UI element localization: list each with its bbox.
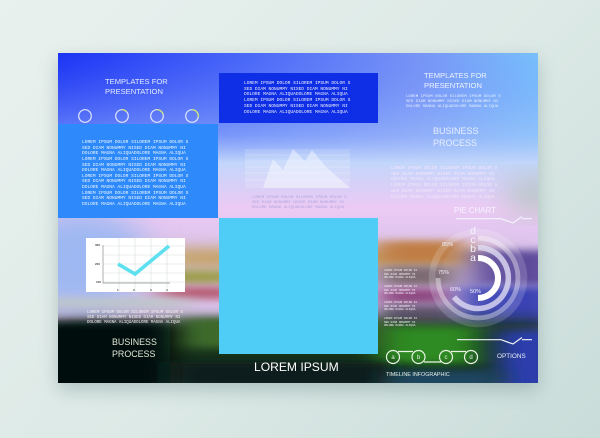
chart: radial pie chart: c [470,234,476,246]
chart: translucent mountain area [245,149,350,188]
chart: radial pie chart: d [470,225,476,237]
chart: radial pie chart [428,225,528,328]
label: timeline infographic: TIMELINE INFOGRAPHIC [386,372,450,378]
heading: templates for presentation right [424,71,487,90]
heading: templates for presentation left: PRESENTATION [105,87,163,96]
heading: business process right [433,126,479,148]
text block: small lorem column: LOREM IPSUM DOLOR SI SED DIAM NONUMMY NI DOLORE MAGNA ALIQUA [384,269,417,279]
divider arrow: options [457,337,532,345]
text block: small lorem column: LOREM IPSUM DOLOR SI SED DIAM NONUMMY NI DOLORE MAGNA ALIQUA [384,301,417,311]
label: options: OPTIONS [497,353,526,360]
heading: business process right: PROCESS [433,138,477,148]
chart: radial pie chart: 50% [470,289,481,295]
heading: pie chart: PIE CHART [454,206,496,215]
heading: business process lower left: PROCESS [112,348,155,358]
divider arrow: pie chart [456,216,532,224]
chart: radial pie chart: b [470,243,476,255]
heading: templates for presentation right: TEMPLATES FOR [424,71,487,80]
chart: line chart card: 3 [150,288,152,292]
chart: line chart card [86,238,185,292]
text block: top center lorem: LOREM IPSUM DOLOR SILOREM IPSUM DOLOR S SED DIAM NONUMMY NISED DIAM NONUMMY NI DOLORE MAGNA ALIQUADOLORE MAGNA ALIQUA LOREM IPSUM DOLOR SILOREM IPSUM DOLOR S SED DIAM NONUMMY NISED DIAM NONUMMY NI DOLORE MAGNA ALIQUADOLORE MAGNA ALIQUA [244,81,350,115]
text block: center lorem under chart: LOREM IPSUM DOLOR SILOREM IPSUM DOLOR S SED DIAM NONUMMY NISED DIAM NONUMMY NI DOLORE MAGNA ALIQUADOLORE MAGNA ALIQUA [252,196,347,210]
text block: right middle lorem: LOREM IPSUM DOLOR SILOREM IPSUM DOLOR S SED DIAM NONUMMY NISED DIAM NONUMMY NI DOLORE MAGNA ALIQUADOLORE MAGNA ALIQUA LOREM IPSUM DOLOR SILOREM IPSUM DOLOR S SED DIAM NONUMMY NISED DIAM NONUMMY NI DOLORE MAGNA ALIQUADOLORE MAGNA ALIQUA [391,166,497,200]
heading: business process lower left: BUSINESS [112,337,157,347]
heading: templates for presentation right: PRESENTATION [424,81,482,90]
timeline: connected circles [386,350,478,364]
heading: business process right: BUSINESS [433,126,479,136]
chart: radial pie chart: a [470,252,476,264]
chart: line chart card: 100 [96,280,101,284]
icons: progress circles [78,109,199,123]
chart: radial pie chart: 60% [450,287,461,293]
timeline: connected circles: b [417,355,421,361]
heading: lorem ipsum: LOREM IPSUM [254,360,339,374]
heading: templates for presentation left: TEMPLATES FOR [105,77,168,86]
text block: small lorem column: LOREM IPSUM DOLOR SI SED DIAM NONUMMY NI DOLORE MAGNA ALIQUA [384,317,417,327]
chart: line chart card: 200 [95,262,100,266]
chart: line chart card: 300 [95,243,100,247]
heading: business process lower left [112,337,157,358]
text block: right top lorem: LOREM IPSUM DOLOR SILOREM IPSUM DOLOR S SED DIAM NONUMMY NISED DIAM NONUMMY NI DOLORE MAGNA ALIQUADOLORE MAGNA ALIQUA [406,95,501,109]
text block: small lorem column: LOREM IPSUM DOLOR SI SED DIAM NONUMMY NI DOLORE MAGNA ALIQUA [384,285,417,295]
timeline: connected circles: d [469,355,473,361]
text block: small lorem column [384,269,417,327]
heading: templates for presentation left [105,77,168,96]
panel: blurred photo background [50,52,546,398]
text block: left blue lorem: LOREM IPSUM DOLOR SILOREM IPSUM DOLOR S SED DIAM NONUMMY NISED DIAM NONUMMY NI DOLORE MAGNA ALIQUADOLORE MAGNA ALIQUA LOREM IPSUM DOLOR SILOREM IPSUM DOLOR S SED DIAM NONUMMY NISED DIAM NONUMMY NI DOLORE MAGNA ALIQUADOLORE MAGNA ALIQUA LOREM IPSUM DOLOR SILOREM IPSUM DOLOR S SED DIAM NONUMMY NISED DIAM NONUMMY NI DOLORE MAGNA ALIQUADOLORE MAGNA ALIQUA LOREM IPSUM DOLOR SILOREM IPSUM DOLOR S SED DIAM NONUMMY NISED DIAM NONUMMY NI DOLORE MAGNA ALIQUADOLORE MAGNA ALIQUA [82,140,188,207]
panel: dark blue text block top [219,73,378,123]
chart: radial pie chart: 85% [442,242,453,248]
chart: line chart card: 2 [133,288,135,292]
chart: line chart card: 4 [166,288,168,292]
chart: line chart card: 1 [117,288,119,292]
panel: cyan block [219,218,378,354]
panel: blue text block left [58,124,218,218]
text block: lorem under line chart: LOREM IPSUM DOLOR SILOREM IPSUM DOLOR S SED DIAM NONUMMY NISED DIAM NONUMMY NI DOLORE MAGNA ALIQUADOLORE MAGNA ALIQUA [87,311,183,325]
chart: radial pie chart: 75% [438,270,449,276]
timeline: connected circles: c [444,355,448,361]
timeline: connected circles: a [391,355,395,361]
